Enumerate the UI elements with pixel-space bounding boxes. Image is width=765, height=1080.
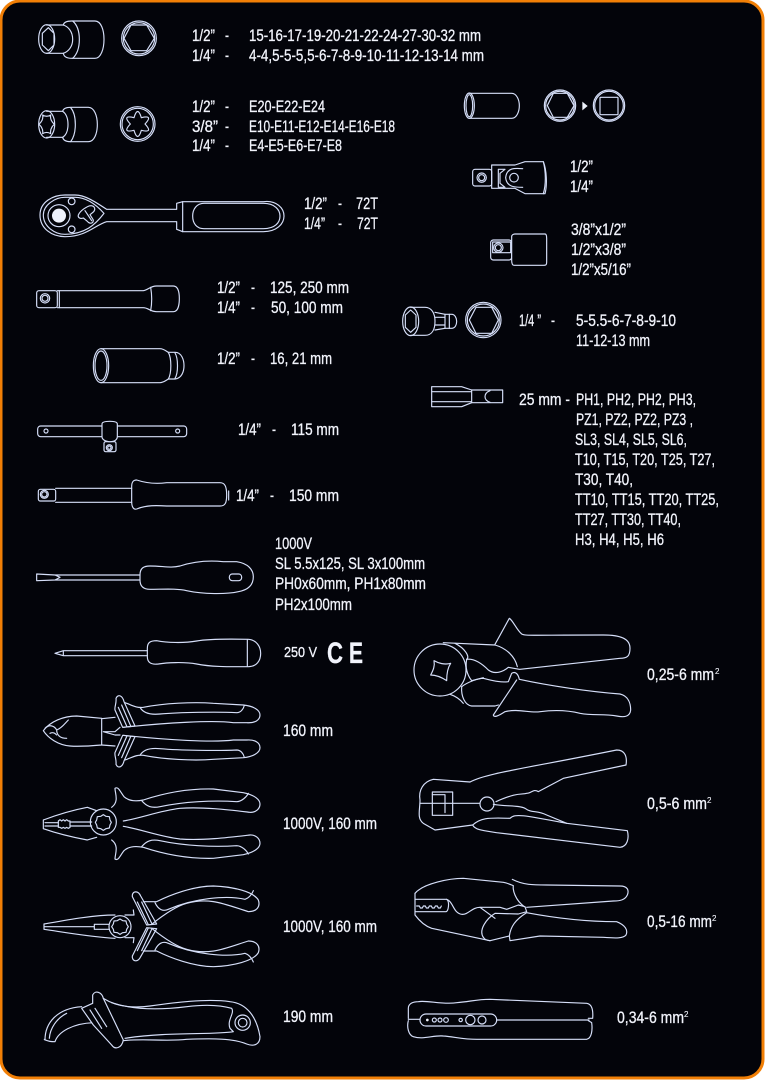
text: bit socket sizes: 11-12-13 mm (576, 332, 650, 350)
text: hex socket sizes (192, 27, 484, 65)
text: universal joint sizes: 1/4” (570, 178, 593, 196)
icon: deep spark plug socket (93, 349, 184, 383)
text: bit list: T10, T15, T20, T25, T27, (575, 451, 715, 469)
text: spinner size: 150 mm (289, 487, 339, 505)
icon: spinner handle (38, 480, 229, 509)
text: terminal crimper range: 2 (707, 796, 712, 805)
text: ferrule crimper range: 0,25-6 mm (647, 666, 714, 684)
text: bit list: T30, T40, (575, 471, 633, 489)
icon: socket with hex to square adapter views (464, 90, 625, 121)
text: long nose pliers size: 1000V, 160 mm (283, 918, 377, 936)
text: T-bar size (238, 421, 339, 439)
text: extension bar sizes: - (251, 279, 255, 297)
text: ratchet sizes: 72T (356, 195, 378, 213)
text: T-bar size: 115 mm (291, 421, 339, 439)
text: ratchet crimper range: 0,5-16 mm (647, 913, 712, 931)
text: bit list (519, 391, 719, 549)
text: torx socket sizes: 1/4” (192, 137, 215, 155)
text: torx socket sizes: E4-E5-E6-E7-E8 (249, 137, 342, 155)
text: extension bar sizes (217, 279, 349, 317)
text: cable knife size: 190 mm (283, 1008, 333, 1026)
text: deep socket sizes: 16, 21 mm (270, 350, 332, 368)
text: ratchet sizes: 72T (357, 215, 378, 233)
icon: universal joint (473, 162, 546, 194)
text: adapter sizes (571, 221, 631, 279)
icon: insulated screwdriver (37, 561, 253, 594)
text: bit list: PH1, PH2, PH2, PH3, (576, 391, 696, 409)
icon: cutting pliers (43, 696, 260, 767)
text: deep socket sizes: - (251, 350, 255, 368)
text: torx socket sizes: E10-E11-E12-E14-E16-E18 (249, 118, 395, 136)
CE mark: C (327, 637, 343, 670)
text: torx socket sizes (192, 98, 395, 155)
text: hex socket sizes: 15-16-17-19-20-21-22-24-27-30-32 mm (249, 27, 481, 45)
text: combination pliers size: 1000V, 160 mm (283, 815, 377, 833)
icon: combination pliers (43, 788, 260, 860)
text: hex socket sizes: 1/4” (192, 47, 215, 65)
icon: socket adapter (491, 234, 547, 265)
text: universal joint sizes: 1/2” (570, 158, 593, 176)
text: deep socket sizes (217, 350, 332, 368)
text: ratchet sizes (304, 195, 378, 233)
text: screwdriver specifications (275, 535, 426, 614)
text: ferrule crimper range: 2 (715, 667, 720, 676)
text: spinner size: - (270, 487, 274, 505)
text: bit list: TT27, TT30, TT40, (575, 511, 681, 529)
text: torx socket sizes: E20-E22-E24 (249, 98, 325, 116)
text: ratchet sizes: 1/4” (304, 215, 325, 233)
text: T-bar size: - (272, 421, 276, 439)
text: tester voltage: 250 V (284, 644, 317, 661)
text: bit socket sizes: - (551, 312, 555, 330)
icon: voltage tester (55, 639, 261, 667)
text: adapter sizes: 1/2”x5/16” (571, 261, 631, 279)
text: terminal crimper range: 0,5-6 mm (647, 795, 707, 813)
text: hex socket sizes: - (225, 27, 229, 45)
text: torx socket sizes: - (225, 137, 229, 155)
text: bit socket sizes (519, 312, 676, 350)
CE mark: E (349, 637, 363, 670)
text: closed crimper range: 2 (684, 1010, 689, 1019)
text: extension bar sizes: 1/4” (217, 299, 240, 317)
icon: ratchet crimping pliers (415, 878, 628, 941)
icon: cable knife (44, 992, 260, 1048)
text: ratchet crimper range: 2 (712, 914, 717, 923)
text: ratchet sizes: 1/2” (304, 195, 327, 213)
text: screwdriver specifications: SL 5.5x125, SL 3x100mm (275, 555, 425, 573)
text: ratchet sizes: - (338, 195, 342, 213)
text: torx socket sizes: - (225, 98, 229, 116)
icon: terminal crimping pliers (419, 750, 628, 847)
text: cutting pliers size: 160 mm (283, 722, 333, 740)
text: torx socket sizes: - (225, 118, 229, 136)
text: screwdriver specifications: PH2x100mm (275, 596, 352, 614)
text: deep socket sizes: 1/2” (217, 350, 240, 368)
text: bit list: 25 mm - (519, 391, 570, 409)
text: screwdriver specifications: 1000V (275, 535, 312, 553)
icon: ratchet handle (40, 195, 284, 237)
icon: screwdriver bit (432, 387, 503, 407)
text: bit list: PZ1, PZ2, PZ2, PZ3 , (576, 411, 693, 429)
text: screwdriver specifications: PH0x60mm, PH1x80mm (275, 575, 426, 593)
text: bit list: H3, H4, H5, H6 (575, 531, 664, 549)
text: ratchet sizes: - (338, 215, 342, 233)
text: extension bar sizes: 1/2” (217, 279, 240, 297)
text: bit list: TT10, TT15, TT20, TT25, (575, 491, 719, 509)
icon: socket extension bar (37, 286, 179, 312)
text: torx socket sizes: 3/8” (192, 118, 218, 136)
icon: sliding T-bar (38, 421, 187, 452)
text: bit socket sizes: 5-5.5-6-7-8-9-10 (576, 312, 676, 330)
text: hex socket sizes: - (225, 47, 229, 65)
text: extension bar sizes: 125, 250 mm (270, 279, 349, 297)
text: extension bar sizes: - (251, 299, 255, 317)
text: spinner size (236, 487, 339, 505)
text: universal joint sizes (570, 158, 593, 196)
icon: torx socket side and end views (39, 107, 155, 142)
text: adapter sizes: 1/2”x3/8” (571, 241, 626, 259)
text: bit socket sizes: 1/4 ” (519, 312, 541, 330)
text: hex socket sizes: 4-4,5-5-5,5-6-7-8-9-10-11-12-13-14 mm (249, 47, 484, 65)
icon: hex socket side and end views (39, 21, 156, 58)
icon: ferrule crimping pliers (414, 618, 631, 717)
text: extension bar sizes: 50, 100 mm (271, 299, 343, 317)
CE mark (327, 637, 363, 670)
icon: closed crimping tool (408, 999, 593, 1039)
text: T-bar size: 1/4” (238, 421, 261, 439)
text: hex socket sizes: 1/2” (192, 27, 215, 45)
text: bit list: SL3, SL4, SL5, SL6, (575, 431, 687, 449)
text: spinner size: 1/4” (236, 487, 259, 505)
icon: bit socket side and end views (403, 302, 501, 338)
text: closed crimper range: 0,34-6 mm (617, 1009, 684, 1027)
text: torx socket sizes: 1/2” (192, 98, 215, 116)
icon: long nose pliers (44, 886, 259, 967)
text: adapter sizes: 3/8”x1/2” (571, 221, 626, 239)
